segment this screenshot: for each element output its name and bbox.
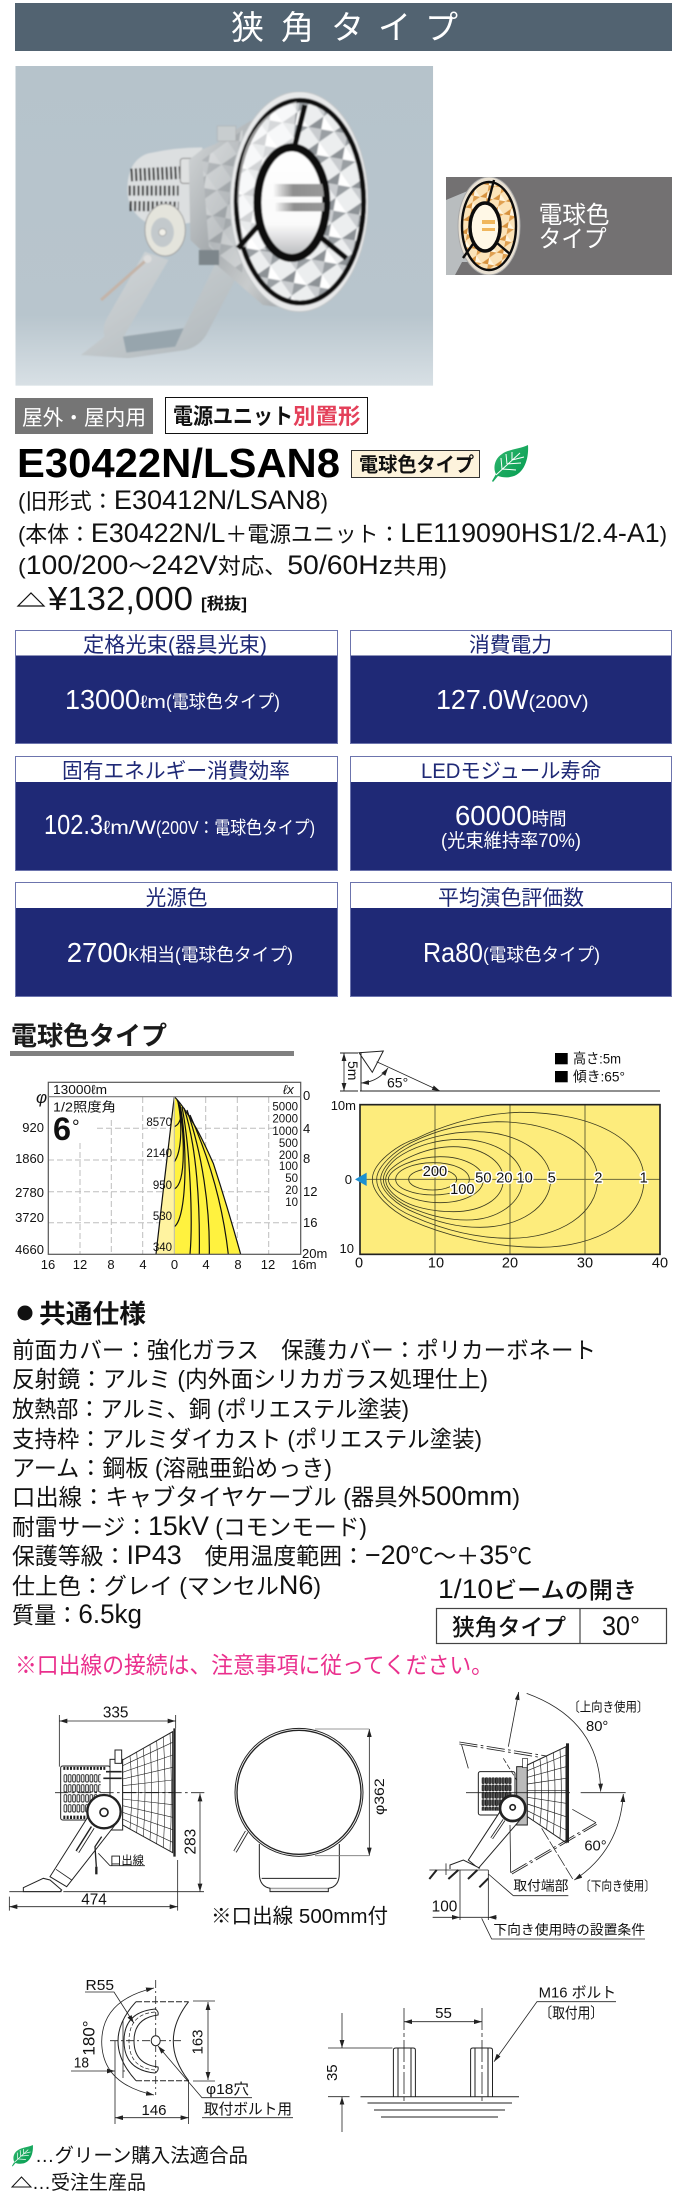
- polar light distribution chart: φ: [36, 1088, 47, 1107]
- polar light distribution chart: 920: [22, 1120, 44, 1135]
- isolux contour chart: 40: [652, 1256, 668, 1272]
- spec card: energy efficiency: 102.3: [44, 809, 103, 840]
- spec card: colour rendering index: 平均演色評価数: [438, 887, 584, 910]
- dimension drawing: side view: [9, 1704, 205, 1911]
- dimension drawing: mounting plate: φ18穴: [206, 2081, 249, 2098]
- price: [税抜]: [201, 595, 247, 613]
- spec card: LED module life: [350, 756, 672, 870]
- mounting diagram: height and tilt: [340, 1050, 660, 1091]
- isolux contour chart: 1: [640, 1171, 648, 1187]
- polar light distribution chart: 10: [285, 1197, 298, 1209]
- dimension drawing: front view: φ362: [371, 1778, 387, 1815]
- spec card: rated luminous flux: 13000: [65, 684, 140, 715]
- polar light distribution chart: 340: [153, 1242, 172, 1254]
- legend: green purchasing: …グリーン購入法適合品: [35, 2145, 248, 2167]
- dimension drawing: tilt range: 取付端部: [513, 1879, 569, 1894]
- polar light distribution chart: 16: [303, 1215, 317, 1230]
- polar light distribution chart: 12: [261, 1257, 275, 1272]
- dimension drawing: M16 bolts: 55: [435, 2005, 452, 2022]
- isolux contour chart: 10: [517, 1171, 533, 1187]
- polar light distribution chart: 0: [303, 1088, 310, 1103]
- text block: common specification list: 放熱部：アルミ、銅 (ポリエステル塗装): [12, 1396, 409, 1422]
- dimension drawing: M16 bolts: M16 ボルト: [539, 1985, 616, 2002]
- isolux contour chart: 0: [355, 1256, 363, 1272]
- warm colour lamp panel: 電球色: [539, 202, 610, 229]
- dimension drawing: mounting plate: R55: [86, 1977, 114, 1994]
- dimension drawing: tilt range: 60°: [584, 1839, 607, 1855]
- spec card: rated luminous flux: ℓm: [140, 692, 166, 712]
- polar light distribution chart: 12: [73, 1257, 87, 1272]
- section heading: warm colour type: [10, 1021, 294, 1056]
- text block: common specification list: 保護等級：IP43 使用温度範囲：−20℃〜＋35℃: [12, 1540, 532, 1570]
- polar light distribution chart: 1000: [272, 1126, 298, 1138]
- mounting diagram: height and tilt: 5m: [345, 1061, 361, 1080]
- text block: common specification list: 支持枠：アルミダイカスト (ポリエステル塗装): [12, 1426, 482, 1452]
- note: cable 500mm: ※口出線 500mm付: [211, 1905, 388, 1928]
- spec card: light source colour: K: [128, 945, 140, 965]
- polar light distribution chart: ℓx: [283, 1082, 294, 1097]
- polar light distribution chart: °: [72, 1117, 80, 1138]
- text: body and power unit: (本体：E30422N/L＋電源ユニット：LE119090HS1/2.4-A1): [18, 518, 667, 548]
- polar light distribution chart: 16m: [291, 1257, 317, 1272]
- polar light distribution chart: 16: [41, 1257, 55, 1272]
- polar light distribution chart: 12: [303, 1184, 317, 1199]
- dimension drawing: mounting plate: [71, 1977, 293, 2124]
- warning note: ※口出線の接続は、注意事項に従ってください。: [15, 1652, 493, 1678]
- polar light distribution chart: 4: [202, 1257, 210, 1272]
- text block: common specification list: [12, 1337, 596, 1629]
- dimension drawing: mounting plate: 146: [141, 2102, 167, 2119]
- dimension drawing: tilt range: 100: [432, 1899, 457, 1916]
- table: 1/10 beam spread: [436, 1574, 666, 1644]
- text block: common specification list: 質量：6.5kg: [12, 1599, 142, 1629]
- badge: separate power unit: [166, 398, 368, 434]
- table: 1/10 beam spread: 30°: [602, 1611, 640, 1641]
- dimension drawing: side view: 335: [103, 1704, 128, 1721]
- text block: common specification list: アーム：鋼板 (溶融亜鉛めっき): [12, 1455, 332, 1481]
- table: 1/10 beam spread: 1/10ビームの開き: [438, 1574, 637, 1604]
- isolux contour chart: 2: [594, 1171, 602, 1187]
- isolux contour chart: 20: [496, 1171, 512, 1187]
- dimension drawing: M16 bolts: 〔取付用〕: [540, 2005, 603, 2022]
- polar light distribution chart: 8: [107, 1257, 115, 1272]
- spec card: rated luminous flux: 定格光束(器具光束): [83, 634, 267, 657]
- isolux contour chart: 0: [345, 1172, 352, 1187]
- isolux contour chart: 5: [548, 1171, 556, 1187]
- spec card: power consumption: 消費電力: [469, 634, 552, 657]
- isolux contour chart: 20: [502, 1256, 518, 1272]
- isolux contour chart: 200: [423, 1164, 447, 1180]
- spec card: power consumption: 127.0W: [436, 684, 529, 715]
- product photo: floodlight: [16, 66, 433, 386]
- polar light distribution chart: 4: [139, 1257, 147, 1272]
- polar light distribution chart: 500: [279, 1138, 298, 1150]
- polar light distribution chart: 2780: [15, 1185, 44, 1200]
- polar light distribution chart: 50: [285, 1173, 298, 1185]
- dimension drawing: mounting plate: 180°: [79, 2020, 98, 2056]
- polar light distribution chart: 8: [234, 1257, 242, 1272]
- polar light distribution chart: 4660: [15, 1242, 44, 1257]
- badge: separate power unit: 別置形: [293, 404, 360, 429]
- spec card: energy efficiency: 固有エネルギー消費効率: [62, 760, 290, 783]
- badge: warm colour type: 電球色タイプ: [359, 454, 474, 476]
- warm colour lamp panel: [446, 177, 672, 275]
- table: 1/10 beam spread: 狭角タイプ: [452, 1614, 566, 1640]
- polar light distribution chart: 13000ℓm: [53, 1082, 107, 1097]
- dimension drawing: M16 bolts: [324, 1985, 616, 2132]
- spec card: rated luminous flux: [16, 630, 338, 744]
- text block: common specification list: 口出線：キャブタイヤケーブル (器具外500mm): [12, 1481, 520, 1511]
- text block: common specification list: 反射鏡：アルミ (内外面シリカガラス処理仕上): [12, 1366, 488, 1392]
- polar light distribution chart: 8570: [146, 1117, 172, 1129]
- text block: common specification list: 仕上色：グレイ (マンセルN6): [12, 1570, 321, 1600]
- text block: common specification list: 耐雷サージ：15kV (コモンモード): [12, 1511, 367, 1541]
- title banner: 狭角タイプ: 狭角タイプ: [231, 9, 458, 46]
- dimension drawing: side view: 口出線: [110, 1852, 144, 1867]
- dimension drawing: mounting plate: 163: [190, 2029, 207, 2055]
- isolux contour chart: 10: [428, 1256, 444, 1272]
- polar light distribution chart: 3720: [15, 1210, 44, 1225]
- polar light distribution chart: 1/2照度角: [53, 1100, 116, 1115]
- polar light distribution chart: 200: [279, 1150, 298, 1162]
- title banner: 狭角タイプ: [15, 3, 672, 51]
- isolux contour chart: 10: [340, 1241, 354, 1256]
- dimension drawing: tilt range: [429, 1692, 655, 1939]
- mounting diagram: height and tilt: 傾き:65°: [573, 1069, 625, 1085]
- model number: E30422N/LSAN8: [17, 440, 340, 486]
- polar light distribution chart: 950: [153, 1180, 172, 1192]
- dimension drawing: mounting plate: 18: [74, 2055, 89, 2072]
- spec card: LED module life: LEDモジュール寿命: [421, 760, 601, 783]
- dimension drawing: tilt range: 〔上向き使用〕: [568, 1699, 648, 1715]
- isolux contour chart: [331, 1098, 668, 1272]
- polar light distribution chart: 0: [171, 1257, 178, 1272]
- polar light distribution chart: 1860: [15, 1151, 44, 1166]
- spec card: power consumption: [350, 630, 672, 744]
- dimension drawing: tilt range: 〔下向き使用〕: [580, 1878, 655, 1894]
- isolux contour chart: 50: [475, 1171, 491, 1187]
- spec card: LED module life: (光束維持率70%): [441, 830, 581, 852]
- spec card: light source colour: 相当(電球色タイプ): [140, 945, 293, 965]
- spec card: LED module life: 60000: [455, 800, 532, 831]
- polar light distribution chart: 530: [153, 1211, 172, 1223]
- dimension drawing: tilt range: 下向き使用時の設置条件: [493, 1921, 645, 1937]
- polar light distribution chart: 8: [303, 1151, 310, 1166]
- dimension drawing: tilt range: 80°: [586, 1719, 608, 1735]
- spec card: energy efficiency: (200V：電球色タイプ): [156, 818, 315, 838]
- polar light distribution chart: 5000: [272, 1102, 298, 1114]
- isolux contour chart: 10m: [331, 1098, 356, 1113]
- polar light distribution chart: 20: [285, 1185, 298, 1197]
- isolux contour chart: 30: [577, 1256, 593, 1272]
- polar light distribution chart: 20m: [302, 1246, 327, 1261]
- polar light distribution chart: 4: [303, 1121, 310, 1136]
- spec card: light source colour: [16, 882, 338, 996]
- spec card: light source colour: 2700: [67, 937, 128, 968]
- polar light distribution chart: 2000: [272, 1114, 298, 1126]
- spec card: colour rendering index: (電球色タイプ): [483, 945, 600, 965]
- text: former model: (旧形式：E30412N/LSAN8): [18, 485, 328, 515]
- spec card: rated luminous flux: (電球色タイプ): [166, 692, 280, 712]
- heading: common specifications: 共通仕様: [39, 1299, 146, 1329]
- polar light distribution chart: 2140: [146, 1148, 172, 1160]
- spec card: colour rendering index: [350, 882, 672, 996]
- isolux contour chart: 100: [450, 1182, 475, 1198]
- spec card: light source colour: 光源色: [146, 887, 208, 910]
- dimension drawing: front view: [235, 1728, 387, 1892]
- dimension drawing: mounting plate: 取付ボルト用: [204, 2101, 292, 2118]
- dimension drawing: side view: 474: [81, 1891, 107, 1908]
- text: voltage: (100/200〜242V対応、50/60Hz共用): [18, 550, 447, 580]
- spec card: colour rendering index: Ra80: [423, 937, 483, 968]
- badge: outdoor and indoor use: [15, 398, 153, 434]
- text block: common specification list: 前面カバー：強化ガラス 保護カバー：ポリカーボネート: [12, 1337, 596, 1363]
- polar light distribution chart: [15, 1082, 327, 1272]
- spec card: energy efficiency: [16, 756, 338, 870]
- mounting diagram: height and tilt: 高さ:5m: [573, 1050, 621, 1066]
- price: ¥132,000: [47, 580, 193, 617]
- spec card: energy efficiency: ℓm/W: [103, 818, 156, 839]
- icon: green leaf: [492, 445, 528, 482]
- badge: outdoor and indoor use: 屋外・屋内用: [22, 407, 146, 430]
- badge: separate power unit: 電源ユニット: [173, 404, 293, 429]
- mounting diagram: height and tilt: 65°: [387, 1075, 408, 1091]
- dimension drawing: M16 bolts: 35: [324, 2064, 341, 2081]
- dimension drawing: side view: 283: [183, 1829, 200, 1854]
- spec card: power consumption: (200V): [528, 692, 588, 712]
- polar light distribution chart: 6: [53, 1111, 71, 1147]
- warm colour lamp panel: タイプ: [539, 226, 607, 253]
- price: [18, 580, 247, 617]
- spec card: LED module life: 時間: [532, 809, 566, 829]
- section heading: warm colour type: 電球色タイプ: [11, 1021, 167, 1051]
- polar light distribution chart: 100: [279, 1161, 298, 1173]
- legend: made to order: …受注生産品: [32, 2172, 146, 2194]
